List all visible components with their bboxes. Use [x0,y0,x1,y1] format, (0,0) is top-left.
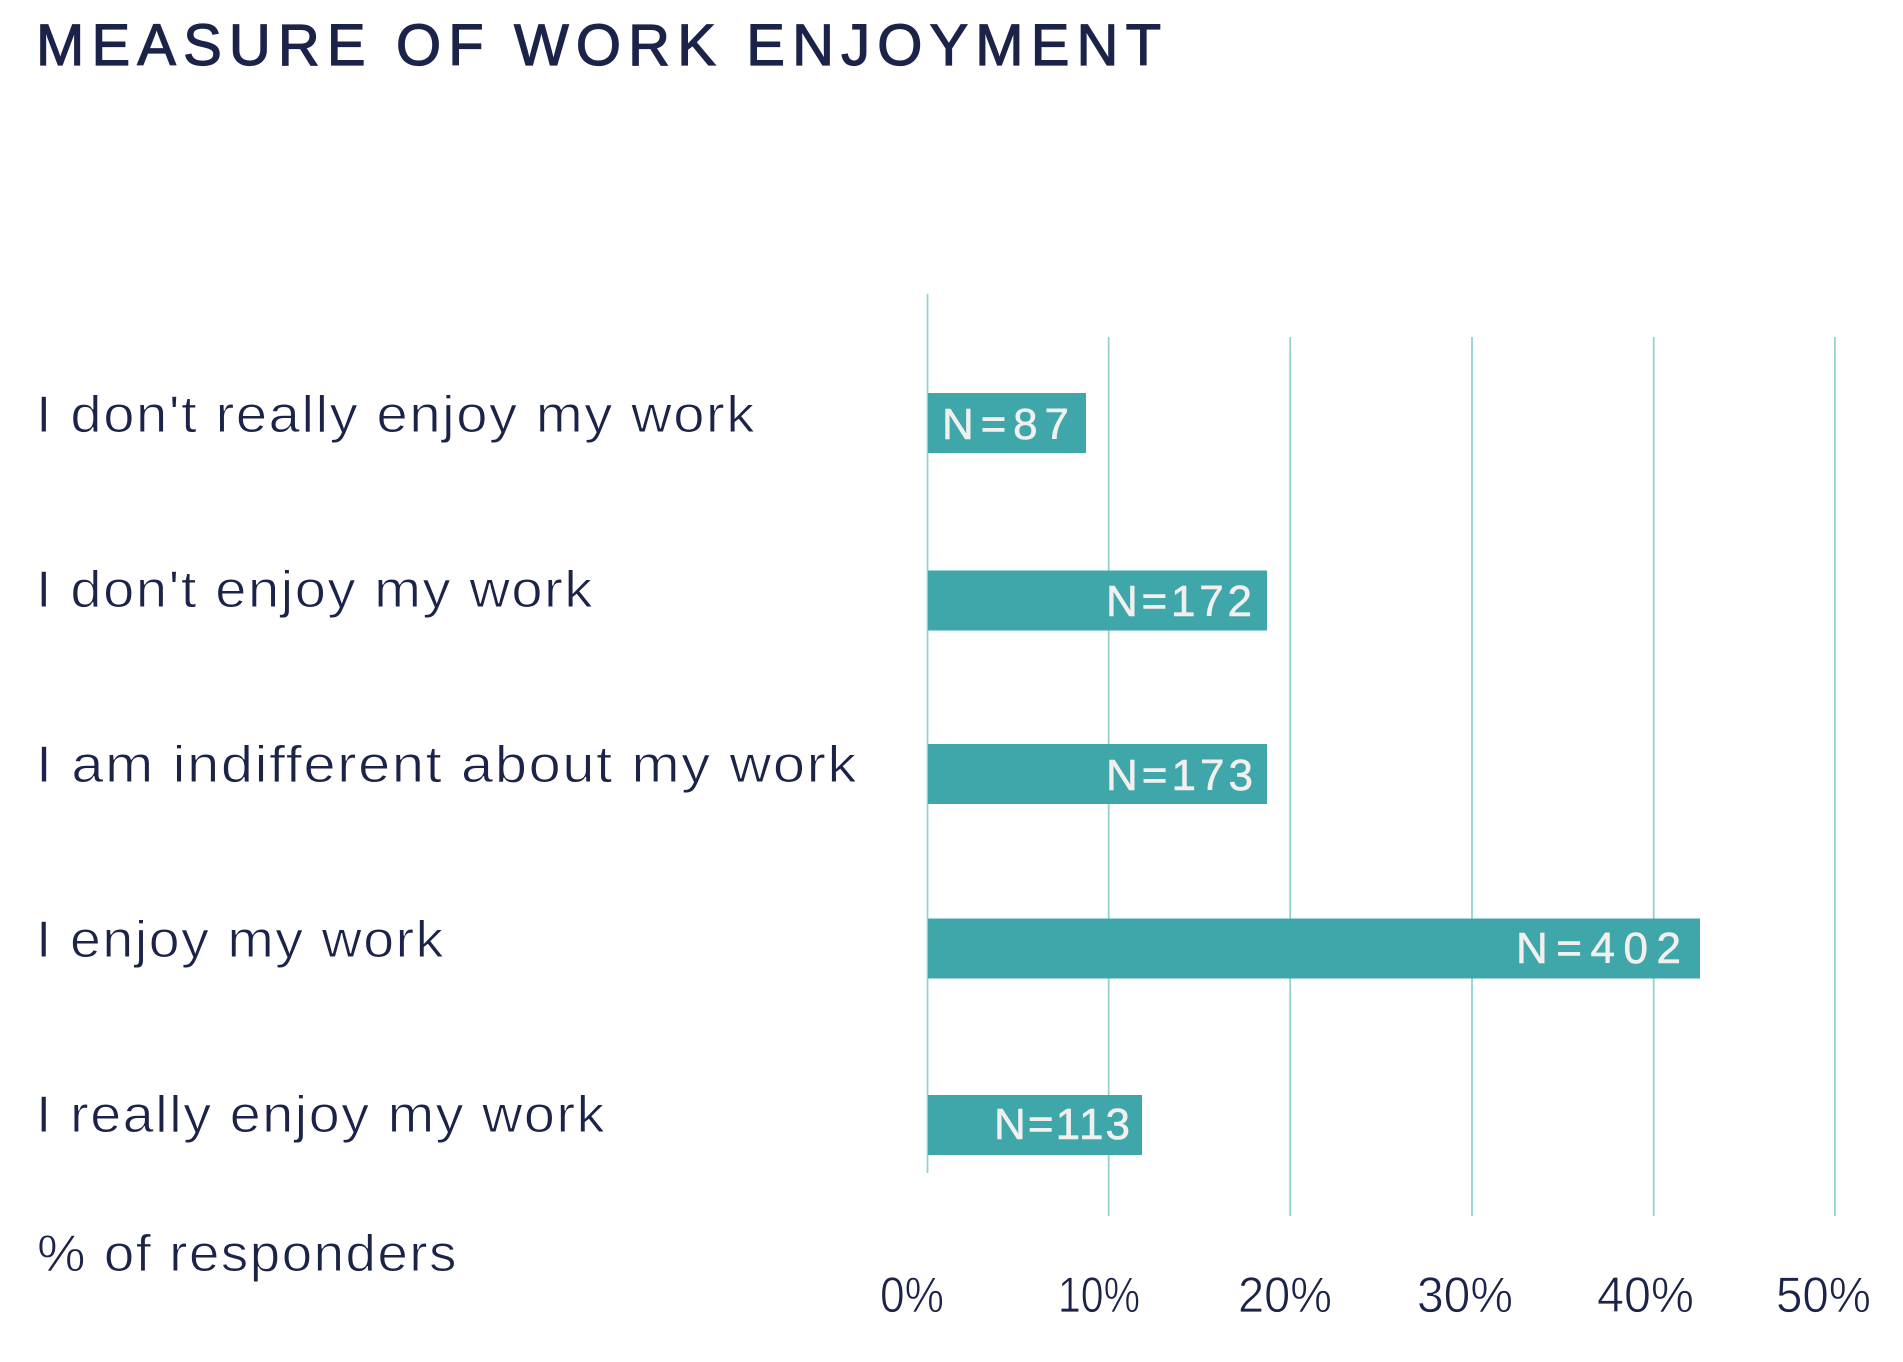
title: MEASURE OF WORK ENJOYMENT [36,13,1161,78]
axis labels [880,1267,1871,1323]
label: I enjoy my work: I enjoy my work [36,911,445,969]
bar chart [928,393,1700,1155]
label: I really enjoy my work: I really enjoy my work [36,1086,606,1144]
label: I don't really enjoy my work: I don't really enjoy my work [36,386,756,444]
bar: N=172 [928,570,1267,630]
axis labels: 30% [1417,1267,1513,1323]
label: I am indifferent about my work: I am indifferent about my work [36,736,858,794]
bar: N=173 [928,744,1267,804]
axis title: % of responders [37,1225,458,1283]
bar: N=87: N=87 [942,400,1069,449]
bar: N=402: N=402 [1516,924,1681,973]
bar: N=113 [928,1095,1142,1155]
gridlines [928,294,1835,1216]
bar: N=173: N=173 [1106,751,1253,800]
label: I don't enjoy my work: I don't enjoy my work [36,561,594,619]
axis labels: 40% [1597,1267,1694,1323]
bar: N=113: N=113 [994,1100,1130,1149]
bar: N=402 [928,918,1700,978]
axis labels: 10% [1058,1267,1140,1323]
axis labels: 20% [1238,1267,1332,1323]
bar: N=87 [928,393,1086,453]
axis labels: 50% [1776,1267,1871,1323]
category labels [36,386,858,1144]
bar: N=172: N=172 [1106,577,1252,626]
axis labels: 0% [880,1267,944,1323]
